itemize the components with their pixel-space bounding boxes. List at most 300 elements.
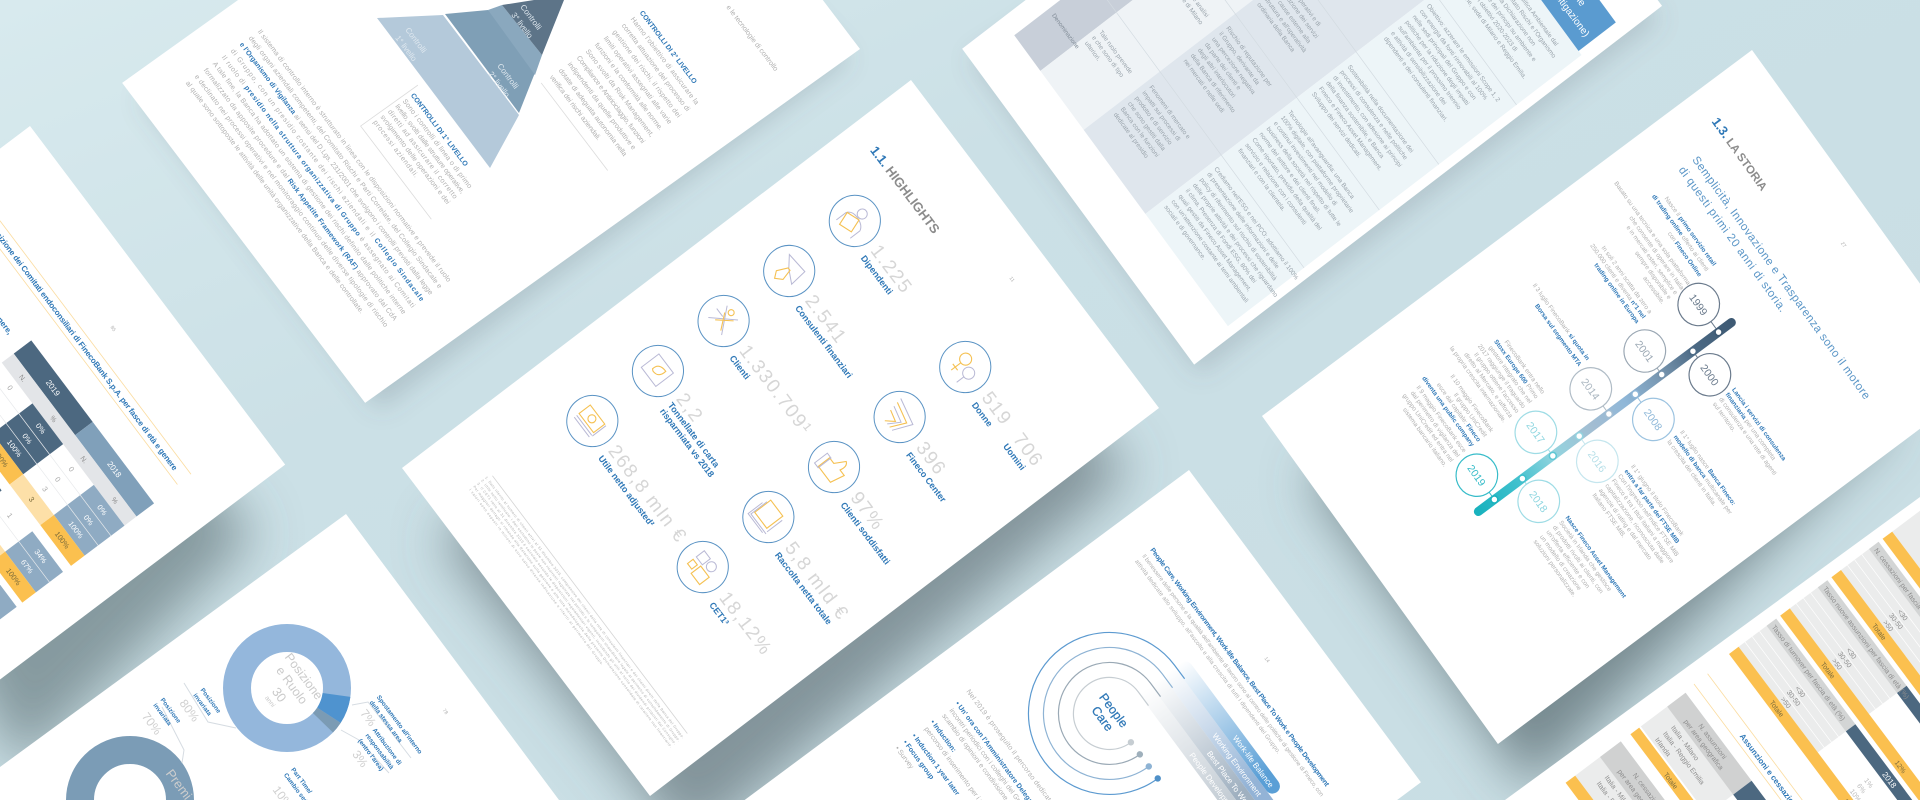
intro paragraph: attività dedicate allo sviluppo, all'ascolto e alla crescita di tutti i dipendenti del Gruppo. (1133, 559, 1281, 755)
panel: top-left controls page (122, 0, 860, 403)
body paragraph: e declinato nei processi operativi e nel monitoraggio continuo delle diverse tipologie di rischio (193, 74, 389, 329)
cell text: column d: della finanza sostenibile, e Banca (1324, 80, 1385, 160)
timeline text above: Basato su una tecnica e una sola piattaforma (1612, 180, 1692, 287)
timeline text above: accessibile. (1641, 275, 1666, 306)
kpi: raccolta netta totale: Raccolta netta totale (773, 550, 834, 626)
icon: stack (748, 498, 785, 535)
donut page texts: anni (263, 695, 276, 709)
year 2018: 2018 (1526, 489, 1549, 515)
kpi: dipendenti: 1.225 (866, 241, 916, 298)
timeline text above: esce dal capitale: Fineco (1435, 382, 1482, 443)
table: turnover per fascia di eta: >50 (1881, 619, 1894, 633)
cell text: column d: norme del settore e dei clienti finali. (1258, 131, 1322, 215)
people care centre label (1085, 691, 1131, 739)
table: turnover per fascia di eta: 30-50 (1836, 651, 1852, 669)
timeline text above: 250.000 clienti e diventa n°1 nel (1588, 242, 1648, 320)
table: turnover per fascia di eta: <30 (1793, 685, 1806, 699)
year 2014 (1562, 359, 1628, 429)
kpi: utile netto adjusted: 268,8 mln € (603, 441, 691, 547)
subtitle: di questi primi 20 anni di storia. (1676, 165, 1788, 315)
table header: N. (78, 455, 88, 465)
kpi: donne e uomini (929, 331, 1060, 480)
box: controlli di 1 livello (361, 85, 489, 219)
table block 1: 3 (27, 495, 36, 504)
icon: person (836, 202, 873, 238)
subtitle: Semplicità, Innovazione e Trasparenza sono il motore (1689, 154, 1872, 402)
kpi: clienti (688, 285, 828, 448)
donut page texts: Part Time/ (289, 767, 313, 795)
cell text: column d: Obiettivo: azzerare le emissioni Scope 1, 2 (1425, 3, 1502, 104)
pyramid chart: Controlli (403, 26, 428, 55)
cell text: column d: Sviluppo dei servizi dedicati. (1310, 91, 1363, 159)
timeline text above: Borsa sul segmento MTA (1533, 303, 1583, 368)
kpi: cet1: 18,12% (714, 588, 776, 660)
table block 1: 3 (40, 485, 50, 493)
timeline text above: Il 9 maggio FinecoBank esce (1415, 384, 1468, 454)
cell text: column d: di presentazione delle informazioni e delle (1205, 171, 1281, 271)
kpi: utile netto adjusted: Utile netto adjusted² (596, 453, 656, 528)
pyramid chart (377, 0, 566, 168)
timeline text above: 2017 raggiunge il traguardo (1476, 343, 1527, 410)
kpi: consulenti finanziari: Consulenti finanziari (793, 303, 854, 380)
kpi: clienti soddisfatti (798, 431, 920, 570)
kpi: fineco center: 396 (911, 438, 950, 480)
cell text: column d (1162, 0, 1577, 321)
timeline text above: diventa una public company (1420, 375, 1476, 448)
panel: people care page (691, 470, 1421, 800)
table: turnover per fascia di eta: Totale (1870, 623, 1887, 642)
table: turnover per fascia di eta: Tasso di turnover per fascia di età (%) (1770, 624, 1846, 722)
box: controlli di 2 livello: Hanno l'obiettivo di assicurare la (629, 16, 700, 106)
timeline text above: diretto al Mercato, e rafforza (1462, 351, 1514, 420)
page heading: People Care, Working Environment, Work-life Balance, Best Place To Work e People Development (1148, 547, 1330, 789)
timeline text below: Società in Irlanda che gestisce (1557, 519, 1613, 593)
timeline text below: Nasce Fineco Asset Management (1564, 515, 1628, 600)
gradient bars: Working Environment (1210, 732, 1264, 799)
box: controlli di 1 livello: livello, svolti dalle strutture operative, (393, 104, 466, 195)
page number: 11 (1008, 276, 1016, 284)
timeline text above: di trading online offerto ai clienti (1650, 193, 1710, 273)
table block 1: 0% (95, 503, 109, 517)
year 2008: 2008 (1641, 408, 1664, 433)
table header: % (48, 415, 57, 424)
table block 1: 0% (20, 432, 34, 446)
timeline text below: finanziaria per una completa (1724, 391, 1777, 462)
year 2000: 2000 (1697, 363, 1720, 389)
icon: clients (707, 301, 741, 335)
donut page texts: 78 (441, 708, 449, 716)
cell text: column d: servizio e relazione con i consulenti (1243, 142, 1308, 226)
cell text: column c: della Banca di riferimento (1189, 53, 1237, 115)
timeline text above: Il 3 luglio FinecoBank si quota in (1531, 282, 1591, 362)
box: controlli di 1 livello: processi aziendali. (371, 119, 419, 179)
cell text: column d: di investimento, con adesione ai principi (1331, 75, 1403, 169)
table header: 2019 (44, 378, 62, 398)
donut page texts: Posizione (282, 651, 326, 702)
timeline text above: Stoxx Europe 600 Primo (1492, 338, 1540, 401)
page number: 14 (1263, 656, 1271, 664)
table: turnover per fascia di eta: Totale (1768, 700, 1784, 719)
timeline text below: di consulenza e una rete di agenti (1717, 396, 1778, 477)
bullet list: • Induction: (929, 719, 957, 754)
kpi: tonnellate di carta (622, 335, 749, 479)
box: controlli di 2 livello: gestione dei rischi, il rispetto dei (611, 29, 682, 120)
cell text: column b: ulteriori. (1083, 40, 1102, 63)
cell text: column c: Banca con le funzioni (1119, 106, 1160, 159)
table column fills (1014, 0, 1582, 326)
table block 1: 0% (82, 513, 96, 527)
table block 1: 0 (5, 383, 15, 392)
icon: buildings (880, 398, 918, 437)
box: controlli di 2 livello: Compliance e Antiriciclaggio, funzioni (575, 55, 646, 145)
body paragraph: e l'Organismo di Vigilanza ai sensi del D.Lgs. 231/2001 che svolgono i controlli previsti dalla legge (238, 42, 434, 296)
timeline text below: un modello di creazione (1538, 534, 1583, 592)
body paragraph: Il ruolo di presidio nella struttura organizzativa di Gruppo è assegnato ai Comitati (220, 54, 416, 310)
footnote: 2. Utile netto rettificato: i dati escludono le poste non ricorrenti registrate nel periodo e le componenti straordinarie legate al perimetro di consolidamento di Gruppo. (480, 479, 681, 742)
cell text: column d: e continui investimenti nel modello di (1272, 120, 1338, 207)
table: turnover per fascia di eta (1729, 503, 1920, 800)
donut page texts: 70% (139, 710, 165, 738)
gradient bars (1139, 658, 1309, 800)
timeline text above: gestore integrato che nel (1487, 345, 1533, 405)
panel: top-right table page (962, 0, 1662, 365)
kpi: donne e uomini: 519 (977, 388, 1016, 430)
cell text: column c: il Gruppo, derivante da (1217, 31, 1261, 87)
timeline text below: sul territorio. (1711, 401, 1737, 434)
kpi: tonnellate di carta: risparmiata vs 2018 (658, 406, 716, 479)
donut page texts: Posizione (159, 697, 182, 725)
cell text: column c: impatti sui processi di (1140, 90, 1182, 143)
box: controlli di 1 livello: svolgimento delle operazioni e dei (379, 114, 451, 206)
table: turnover per fascia di eta: 12% (1893, 760, 1907, 775)
table: turnover per fascia di eta: Totale (1819, 661, 1836, 680)
table header: % (109, 496, 119, 506)
bullet list: • Survey (893, 745, 915, 771)
header cell: mitigazione (1499, 0, 1616, 51)
timeline text above: gruppo UniCredit ed entra nel (1401, 393, 1454, 464)
cell text: column d: Fineco e Fineco Asset Management. (1317, 86, 1383, 173)
timeline text below: entra a far parte del FTSE MIB (1623, 468, 1681, 545)
kpi: consulenti finanziari (753, 235, 883, 383)
row separators (1090, 0, 1517, 268)
panel: central highlights page (402, 80, 1159, 796)
year 2019: 2019 (1464, 463, 1487, 489)
icon: banknotes (574, 405, 606, 438)
footnote: 1. Dato riferito al numero di clienti attivi al 31 dicembre 2019, comprensivo dei clienti della rete di consulenti finanziari e dei clienti diretti della Banca del Gruppo. (484, 476, 685, 739)
box: controlli di 2 livello: CONTROLLI DI 2° LIVELLO (638, 9, 699, 86)
donut page texts: (entro l'area) (356, 738, 385, 772)
body paragraph: degli organi aziendali competenti, del Comitato Rischi e Parti Correlate, del Collegio Sindacale e (247, 35, 443, 290)
body paragraph (184, 29, 452, 335)
year 2008 (1616, 379, 1682, 449)
cell text: column d: sociali e di governance. (1162, 204, 1207, 262)
timeline text above: In soli 2 anni scatta da zero a (1600, 245, 1653, 316)
panel: bottom-left donut page (0, 514, 559, 800)
box: controlli di 2 livello: verifica dei rischi aziendali. (548, 74, 602, 142)
timeline text below: Il 1° luglio nasce Banca Fineco: (1678, 429, 1737, 507)
intro paragraph: Il benessere delle persone e la qualità dell'ambiente di lavoro sono al centro delle politiche di gestione di Fineco, con (1140, 554, 1324, 798)
cell text: column d: Crediamo nell'ESG e nei PCO: adottiamo il 100% (1212, 166, 1300, 282)
year 1999: 1999 (1686, 293, 1709, 318)
cell text: column d: Come riportato, presidio della qualità del (1250, 137, 1323, 232)
timeline text above: con Fineco Online (1666, 231, 1703, 279)
timeline text above: dal perimetro di vigilanza del (1409, 390, 1461, 459)
cell text: column d: il clima. Presenza di Fondi ESG, 80% dei (1184, 188, 1257, 285)
timeline text above (1369, 161, 1718, 469)
cell text: column c: dedicate al presidio (1112, 112, 1150, 160)
table block 2 (0, 409, 63, 603)
kpi: dipendenti (819, 185, 929, 307)
page number: 85 (109, 325, 117, 333)
timeline text below: Fineco è tra i titoli italiani a maggiore (1610, 478, 1675, 565)
kpi: donne e uomini: 706 (1008, 430, 1047, 471)
table: cessazioni per area geografica (1566, 741, 1765, 800)
timeline text below: soluzioni personalizzate. (1532, 539, 1577, 599)
bullet list: • Induction 1 year later (910, 733, 961, 797)
cell text: column d: e attività di sensibilizzazione dei (1389, 30, 1448, 107)
cell text: column c: Rischio di reputazione per (1224, 25, 1273, 88)
row header: Denominazione (1050, 13, 1080, 51)
cell text: column d: delle proprie attività e dei processi che riguardano (1191, 182, 1279, 299)
people care centre label: People (1096, 691, 1131, 730)
kpi: clienti: Clienti (727, 353, 752, 381)
table: assunzioni per area geografica: Italia - Reggio Emilia (1661, 731, 1705, 786)
table: assunzioni per area geografica: Irlanda (1653, 737, 1672, 758)
table: turnover per fascia di eta: <30 (1896, 609, 1908, 622)
pyramid chart: Controlli (495, 62, 520, 91)
cell text: column d: policy di riferimento sul rischio di sostenibilità (1198, 177, 1278, 283)
timeline text above: sistema bancario italiano. (1401, 407, 1448, 469)
page number: 27 (1839, 241, 1847, 249)
table block 1: 0% (34, 421, 48, 436)
timeline text above: e in mercati esteri, semplice e (1625, 225, 1679, 297)
box: controlli di 2 livello: limiti operativi assegnati alle varie (602, 36, 673, 126)
kpi: consulenti finanziari: 2.541 (800, 291, 851, 348)
donut page texts: 3% (349, 748, 371, 770)
cell text: column c: da parte dei clienti e (1203, 42, 1242, 92)
cell text: column b: e che sono di tipo (1090, 35, 1125, 79)
footnote: 3. Il CET1 ratio al 31 dicembre 2019 è calcolato secondo le disposizioni regolamentari vigenti, includendo gli utili al netto dei dividendi proposti dal Consiglio. (476, 482, 677, 745)
side text: e le tecnologie di controllo (724, 4, 779, 73)
donut page texts: Spostamento all'interno (375, 694, 423, 756)
donut chart: posizione e ruolo (237, 638, 350, 738)
kpi: raccolta netta totale: 5,8 mld € (780, 538, 853, 625)
donut page texts: 7% (357, 707, 379, 729)
timeline text above: che consente di operare in Italia (1627, 215, 1685, 292)
gradient bars: Work-life Balance (1231, 734, 1276, 790)
cell text: column d: Sostenibilità nella documentazione dei (1346, 64, 1415, 154)
cell text: column d: processi di consulenza e nelle politiche (1338, 69, 1409, 162)
kpi: utile netto adjusted (557, 385, 703, 556)
kpi: dipendenti: Dipendenti (859, 253, 895, 297)
pyramid chart: Controlli (518, 3, 543, 32)
donut page texts: della stessa area (368, 699, 404, 744)
kpi: clienti: 1.330.709¹ (735, 341, 816, 439)
table block 2: 34% (32, 548, 49, 565)
table: assunzioni per area geografica: Italia - Milano (1669, 725, 1700, 762)
table block 1: 0 (53, 475, 63, 484)
heading: assunzioni e cessazioni (1694, 674, 1884, 800)
cell text: column c (1112, 0, 1408, 175)
timeline text below: di prodotti rivolti ai clienti, con (1551, 524, 1605, 596)
table: turnover per fascia di eta: >50 (1779, 696, 1792, 710)
cell text: column c: nei mercati e nelle sedi (1182, 58, 1225, 114)
timeline text above: trading online in Europa (1592, 262, 1641, 325)
body paragraph: formalizzato da apposite procedure e dal Risk Appetite Framework (RAF) approvato dal CdA (202, 67, 398, 322)
box: controlli di 1 livello: CONTROLLI DI 1° LIVELLO (409, 92, 470, 168)
timeline text above: Il gruppo ottiene l'accesso (1472, 352, 1520, 415)
year 2019 (1448, 446, 1513, 515)
icon: paper leaf (641, 354, 673, 386)
cell text: column b: Tale ruolo prevede (1097, 29, 1134, 76)
cell text: column d: sull'ambiente per il prossimo triennio (1396, 25, 1462, 111)
kpi: clienti soddisfatti: Clienti soddisfatti (839, 500, 892, 566)
table block 1: 100% (66, 519, 85, 540)
body paragraph: al quale sono sottoposte le attività delle unità organizzative della Banca e delle controllate. (184, 80, 365, 315)
timeline text above: Nasce il primo servizio retail (1663, 196, 1717, 268)
table header: 2018 (105, 460, 123, 480)
body paragraph: Il sistema di controllo interno è strutturato in linea con le disposizioni normative e prevede il ruolo (256, 29, 452, 284)
kpi: tonnellate di carta: 2,2 (671, 389, 707, 427)
year 2018 (1504, 463, 1568, 531)
cell text: column d: politiche per la riduzione degli impatti (1403, 19, 1470, 107)
table: turnover per fascia di eta: <30 (1844, 647, 1857, 661)
pyramid chart: 1° livello (393, 34, 419, 64)
year 1999 (1670, 275, 1737, 347)
table: turnover per fascia di eta: 30-50 (1785, 689, 1801, 708)
cell text: column d: business della società nel rispetto di tutte le (1265, 126, 1343, 228)
donut page texts: invariata (151, 702, 173, 728)
box: controlli di 2 livello: funzioni e la conformità alle norme. (593, 42, 664, 132)
cell text: column d: Tecnologie all'avanguardia: una Banca (1286, 109, 1356, 201)
year 2016 (1560, 421, 1626, 491)
people care centre label: Care (1089, 704, 1116, 734)
table header: N. (17, 374, 27, 384)
box: controlli di 2 livello: corretta attuazione del processo di (620, 23, 691, 113)
timeline text below: Il 1° giugno il titolo FinecoBank (1629, 463, 1686, 538)
year 2017: 2017 (1523, 420, 1546, 446)
cell text: column c: ordinaria della Banca (1255, 2, 1296, 54)
donut page texts: 80% (177, 697, 202, 725)
donut page texts: 30 (269, 684, 290, 705)
cell text: column d: quali gestiti da Fineco Asset Management, (1177, 193, 1253, 293)
table: turnover per fascia di eta: 1% (1862, 777, 1874, 790)
timeline text below: Italiano FTSE MIB. (1591, 492, 1627, 539)
leader lines (162, 683, 411, 773)
heading: 1.3. LA STORIA (1709, 114, 1771, 193)
box: controlli di 1 livello: diretti ad assicurare il corretto (386, 109, 458, 201)
icon: thumb up (815, 447, 852, 485)
timeline text above: la propria crescita internazionale. (1448, 345, 1507, 424)
cell text: column c: prodotto e di servizio (1133, 95, 1174, 147)
year 2016: 2016 (1585, 449, 1607, 475)
table block 2: 1 (5, 511, 15, 520)
year 2017 (1507, 403, 1572, 471)
donut page texts (126, 566, 459, 800)
timeline text below (1530, 387, 1796, 624)
box: controlli di 2 livello: indipendenti da quelle produttive e (566, 61, 637, 151)
pyramid chart: 2° livello (486, 70, 512, 100)
year 2000 (1674, 336, 1739, 404)
kpi: donne e uomini: Uomini (1001, 442, 1027, 472)
table header (2, 340, 154, 526)
kpi: fineco center (864, 381, 977, 508)
table: assunzioni per area geografica: per area geografica (1682, 719, 1724, 772)
cell text: column d: finanziari e con la clientela. (1236, 148, 1287, 213)
donut page texts: invariata (191, 692, 213, 718)
table: turnover per fascia di eta: Tasso nuove assunzioni per fascia di età (%) (1821, 586, 1910, 701)
bullet list: • Focus group (901, 739, 935, 781)
body paragraph: di Gruppo, con un presidio costante dei rischi aziendali e il Collegio Sindacale (229, 48, 425, 303)
table: assunzioni per area geografica (1630, 693, 1830, 800)
cell text: column c: che sono gestiti dalla (1126, 101, 1167, 153)
timeline text below: modello di banca multicanale per (1672, 434, 1733, 516)
timeline text below: capitalizzazione, riconosciuta dalle (1603, 483, 1666, 565)
panel: bottom-right table page (1505, 497, 1920, 800)
kpi: tonnellate di carta: Tonnellate di carta (666, 400, 722, 470)
cell text: column d: 100% digitale, con piattaforme proprietarie (1279, 115, 1355, 215)
icon: gender (945, 351, 982, 387)
icon: bags (685, 550, 720, 585)
pyramid chart: 3° livello (509, 11, 535, 41)
kpi: cet1 (667, 531, 788, 669)
box: controlli di 1 livello: Sono i controlli di linea o di primo (401, 98, 473, 190)
cell text: column d: con energia da fonti rinnovabili al 100% (1418, 8, 1489, 102)
timeline (1445, 275, 1766, 554)
panel: left table page (0, 126, 285, 800)
kpi: donne e uomini: Donne (970, 400, 995, 429)
cell text: column b (1083, 0, 1271, 90)
kpi: raccolta netta totale (733, 481, 865, 634)
icon: tie (769, 253, 806, 290)
timeline text below: un'offerta efficiente e con (1544, 529, 1591, 590)
cell text: column d: nelle sedi principali del Gruppo e con (1411, 14, 1478, 102)
timeline text below: la crescita dei clienti in Italia. (1665, 439, 1718, 508)
timeline text below: agenzie di rating e dal mercato (1597, 487, 1653, 562)
table block 3 (0, 485, 17, 637)
body paragraph: A tale fine, la Banca ha adottato un sistema di gestione dei rischi definito dalle politiche interne (211, 61, 407, 316)
table block 2: 67% (19, 558, 35, 575)
footnote: I valori sono esposti in milioni di euro salvo diversa indicazione e riferiti al perimetro del Gruppo. (468, 488, 604, 666)
box: controlli di 2 livello: dotate di adeguata autonomia nella (557, 68, 628, 158)
kpi: fineco center: Fineco Center (904, 450, 949, 505)
donut page texts: responsabilità (364, 732, 395, 771)
donut page texts: Attribuzione di (371, 727, 403, 767)
cell text: column c: degli altri interlocutori (1196, 47, 1237, 99)
table: turnover per fascia di eta: >50 (1830, 658, 1843, 672)
year 2001: 2001 (1632, 339, 1655, 365)
kpi: cet1: CET1³ (707, 600, 731, 627)
timeline text above: sempre disponibile e (1633, 250, 1673, 301)
bullet list (891, 689, 1131, 800)
donut page texts: Posizione (199, 687, 222, 715)
box: controlli di 2 livello: Sono svolti da Risk Management, (584, 48, 655, 139)
people care arcs (996, 600, 1225, 800)
table: turnover per fascia di eta: 30-50 (1887, 612, 1904, 631)
table block 1: 100% (53, 530, 72, 551)
cell text: column d: dipendenti e dei consulenti finanziari. (1382, 36, 1449, 124)
table block 1: 100% (5, 438, 24, 459)
timeline text above: Il 10 maggio FinecoBank (1449, 373, 1495, 434)
timeline text above: Il gruppo UniCredit (1452, 392, 1488, 439)
cell text: column d: con un'attenzione costante ai temi ambientali (1170, 199, 1249, 304)
box: controlli di 2 livello (541, 9, 711, 170)
donut page texts: e Ruolo (273, 664, 310, 707)
footnote: Per maggiori dettagli si rimanda alla Relazione sulla gestione e alle note metodologiche della presente Dichiarazione consolidata di carattere non finanziario. (472, 485, 673, 748)
cell text: column c: una percezione negativa (1210, 36, 1257, 96)
table: turnover per fascia di eta: 2018 (1880, 770, 1898, 790)
year 2014: 2014 (1578, 377, 1601, 403)
